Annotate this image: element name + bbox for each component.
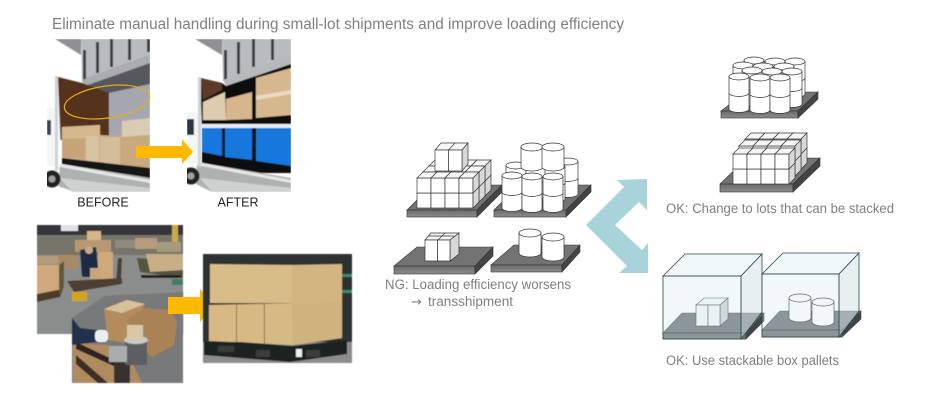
arrow: two-way chevron to solutions: [586, 179, 648, 273]
callout: empty space ellipse: [62, 80, 152, 124]
panel: NG unstackable lots: [385, 143, 591, 310]
photo: warehouse floor: [37, 225, 183, 334]
photo: truck after: [182, 39, 291, 192]
pallet: stacked boxes: [720, 133, 820, 192]
pallet: small cylinder lot: [491, 229, 580, 272]
pallet: small box lot: [394, 233, 493, 274]
pallet: stacked cylinders: [721, 57, 818, 118]
arrow: before to after: [136, 139, 193, 164]
label: transshipment: transshipment: [428, 294, 513, 309]
label: OK stacked lots: OK: Change to lots that can be stacked: [666, 201, 894, 216]
label: OK box pallets: OK: Use stackable box pallets: [666, 353, 839, 368]
pallet: mixed cylinders: [494, 143, 591, 217]
title: Eliminate manual handling during small-lot shipments and improve loading efficiency: [52, 16, 624, 33]
panel: warehouse photos and stacked pallet: [37, 225, 352, 383]
label: before: BEFORE: [77, 196, 129, 210]
pallet: mixed boxes: [407, 143, 502, 217]
photo: truck before: [44, 39, 150, 192]
label: transshipment: →: [411, 295, 422, 310]
photo: stacked cartons on pallet: [203, 254, 352, 363]
label: NG result: NG: Loading efficiency worsens: [385, 277, 571, 292]
panel: truck before and after: [44, 39, 291, 210]
box pallet: small box: [663, 254, 764, 339]
box pallet: small cylinders: [762, 253, 861, 337]
panel: OK stackable lots: [663, 57, 894, 368]
photo: small-lot cargo on cart: [72, 292, 183, 383]
label: after: AFTER: [218, 196, 258, 210]
arrow: loose cargo to stacked pallet: [168, 289, 215, 322]
